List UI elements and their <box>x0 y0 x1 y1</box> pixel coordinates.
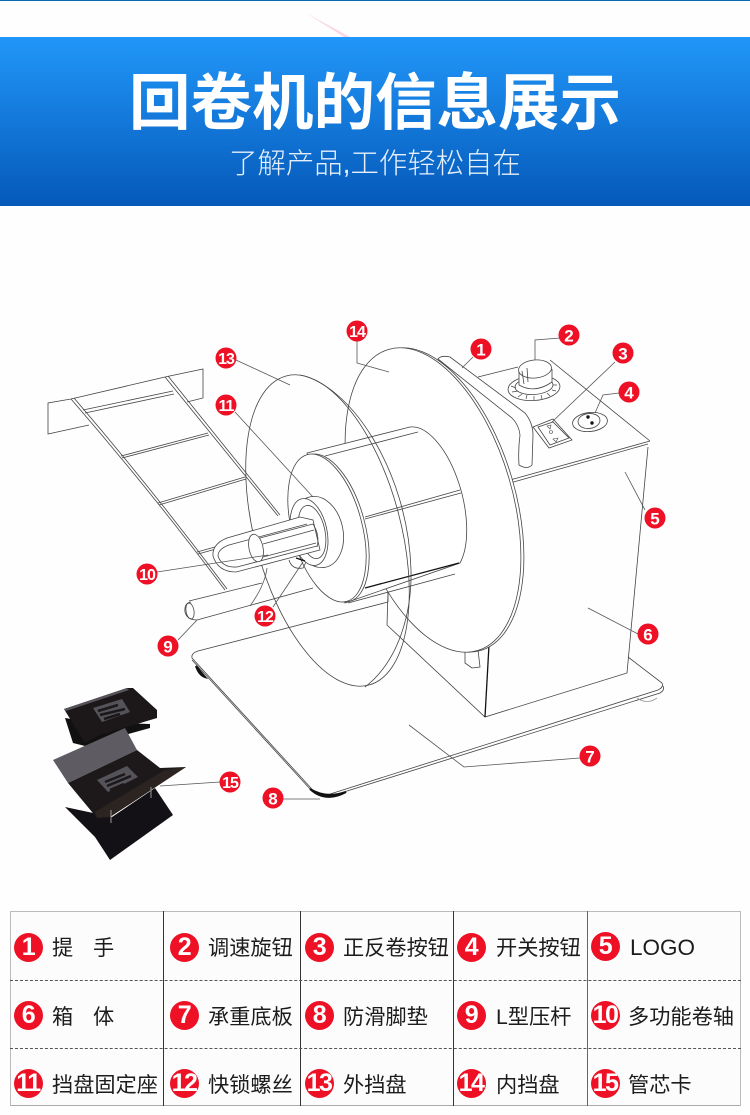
text: 13 <box>307 1068 331 1096</box>
badge 2: 2 <box>564 326 574 346</box>
badge 11 <box>216 394 236 416</box>
legend 12 <box>170 1068 293 1098</box>
legend 8: 防滑脚垫 <box>343 1006 428 1029</box>
text: 14 <box>459 1068 483 1096</box>
legend 9: L型压杆 <box>496 1006 571 1029</box>
badge 4: 4 <box>624 384 634 402</box>
badge 15 <box>220 772 240 792</box>
icon: rubber feet <box>196 666 657 797</box>
badge 14 <box>346 320 368 342</box>
badge 5: 5 <box>650 510 660 528</box>
legend 8 <box>305 1000 428 1030</box>
badge 11: 11 <box>219 398 235 415</box>
legend 3 <box>305 932 449 962</box>
base plate <box>192 602 664 797</box>
legend 7: 承重底板 <box>208 1006 293 1029</box>
decorative streak <box>308 14 350 37</box>
badge 1 <box>470 338 492 360</box>
legend 3: 正反卷按钮 <box>343 937 449 960</box>
lower core clip <box>53 728 186 860</box>
legend 14: 内挡盘 <box>496 1074 560 1097</box>
legend 6: 箱 <box>52 1006 73 1029</box>
icon: core clips <box>53 688 186 860</box>
badge 6 <box>638 624 658 644</box>
text: 10 <box>593 1000 617 1028</box>
badge 1: 1 <box>476 340 486 360</box>
text: 6 <box>22 1000 34 1028</box>
legend 2: 调速旋钮 <box>208 937 293 960</box>
speed knob <box>507 359 561 402</box>
legend 15 <box>591 1068 692 1098</box>
badge 3 <box>612 342 634 364</box>
outer disc <box>216 357 439 704</box>
legend 1 <box>14 932 114 962</box>
top rule <box>0 0 750 1</box>
housing box <box>387 360 650 717</box>
badge 7: 7 <box>585 748 595 766</box>
inner disc <box>313 327 556 673</box>
legend table background <box>10 911 741 1106</box>
legend 5 <box>591 932 695 961</box>
multifunction shaft <box>213 517 320 572</box>
support arm <box>348 574 455 603</box>
badge 3: 3 <box>618 344 628 364</box>
text: 8 <box>313 1000 325 1028</box>
legend 11 <box>14 1068 158 1098</box>
callout leader lines <box>157 338 645 799</box>
legend 13: 外挡盘 <box>343 1074 407 1097</box>
text: 11 <box>16 1068 40 1096</box>
legend 13 <box>305 1068 407 1098</box>
title: 回卷机的信息展示 <box>129 69 621 138</box>
text: 9 <box>465 1000 477 1028</box>
label strip <box>48 369 280 590</box>
power socket <box>572 411 608 433</box>
legend 5: LOGO <box>630 935 695 960</box>
legend 14 <box>457 1068 560 1098</box>
legend 7 <box>170 1000 293 1030</box>
legend 2 <box>170 932 293 962</box>
legend 6: 体 <box>93 1006 114 1029</box>
text: 5 <box>599 932 611 960</box>
badge 4 <box>618 382 640 402</box>
badge 9: 9 <box>163 638 173 656</box>
text: 15 <box>593 1068 617 1096</box>
badge 12: 12 <box>257 609 274 626</box>
badge 8 <box>262 788 284 808</box>
badge 15: 15 <box>222 775 239 792</box>
text: 1 <box>22 932 34 960</box>
badge 7 <box>580 746 600 766</box>
legend 12: 快锁螺丝 <box>208 1074 293 1097</box>
badge 8: 8 <box>268 790 278 808</box>
pressure rod <box>185 583 313 620</box>
badge 6: 6 <box>643 626 653 644</box>
legend 10: 多功能卷轴 <box>628 1006 734 1029</box>
label roll <box>274 427 467 610</box>
badge 14: 14 <box>349 324 366 341</box>
subtitle: 了解产品,工作轻松自在 <box>229 148 521 180</box>
quick lock screw <box>289 558 306 568</box>
direction switch <box>533 419 572 448</box>
legend 6 <box>14 1000 114 1030</box>
badge 12 <box>254 606 276 626</box>
handle <box>438 356 533 468</box>
legend 1: 提 <box>52 937 73 960</box>
legend 11: 挡盘固定座 <box>52 1074 158 1097</box>
badge 13: 13 <box>218 351 235 368</box>
badge 10 <box>136 564 158 584</box>
header band <box>0 37 750 206</box>
legend 4: 开关按钮 <box>496 937 581 960</box>
badge 2 <box>558 324 580 346</box>
text: 2 <box>178 932 190 960</box>
text: 7 <box>178 1000 190 1028</box>
text: 4 <box>465 932 477 960</box>
legend 10 <box>591 1000 734 1030</box>
legend 1: 手 <box>93 937 114 960</box>
legend 4 <box>457 932 581 962</box>
legend 9 <box>457 1000 571 1030</box>
badge 10: 10 <box>139 567 156 584</box>
legend 15: 管芯卡 <box>628 1074 692 1097</box>
badge 13 <box>216 348 236 368</box>
text: 3 <box>313 932 325 960</box>
disc fixing seat <box>284 492 350 572</box>
text: 12 <box>172 1068 196 1096</box>
callout badges <box>136 320 666 808</box>
badge 9 <box>158 636 178 656</box>
badge 5 <box>644 508 666 528</box>
upper core clip <box>64 688 157 746</box>
